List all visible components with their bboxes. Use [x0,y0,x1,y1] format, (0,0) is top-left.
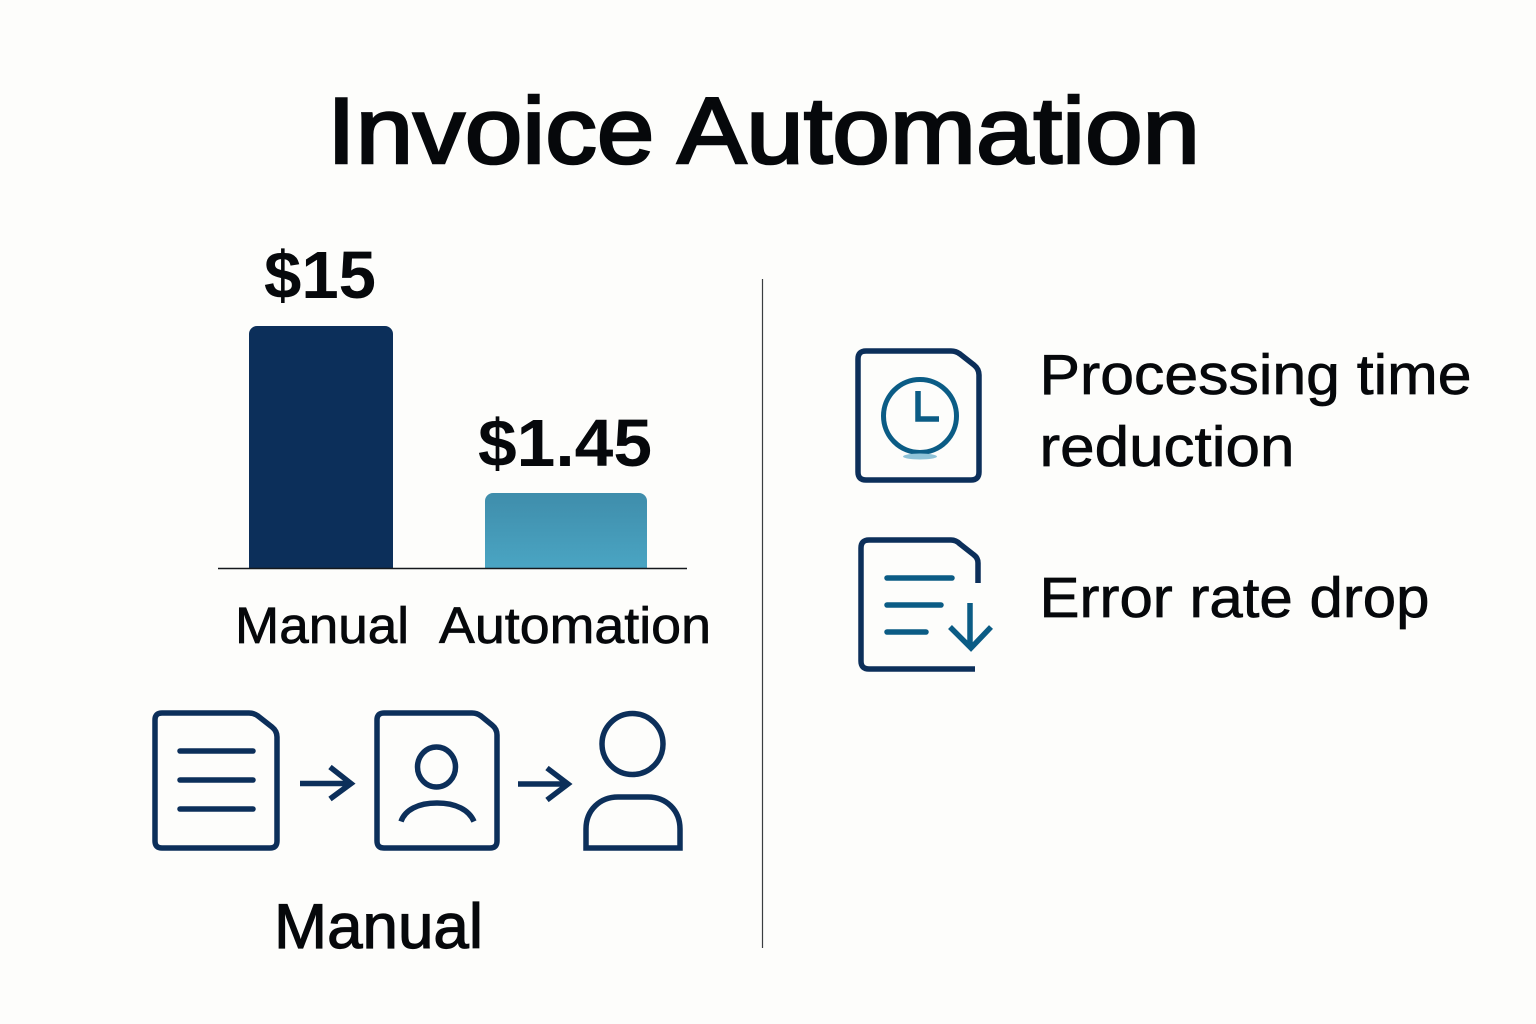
chart baseline [218,568,687,570]
text: Processing time reduction: reduction [1040,415,1294,479]
icon: person [586,714,680,848]
value: $1.45: $1.45 [478,406,652,481]
text: Processing time reduction: Processing time [1040,343,1472,407]
icon: clock document [858,351,979,480]
title: Invoice Automation [327,78,1200,183]
panel: manual workflow [155,713,680,848]
center divider [762,279,764,948]
icon: document with down arrow [861,540,991,669]
bar: manual [249,326,393,568]
arrow: document to profile [300,767,351,799]
value: $15: $15 [264,238,376,313]
axis label: Automation: Automation [439,597,711,654]
axis label: Manual: Manual [235,597,409,654]
bar: automation [485,493,647,568]
label: Manual workflow: Manual [274,892,483,962]
icon: text document [155,713,277,848]
icon: profile document [377,713,497,848]
panel: benefit error rate [861,540,1430,669]
text: Processing time reduction [1040,343,1472,479]
panel: cost bar chart [218,238,711,654]
arrow: profile to person [518,768,568,800]
panel: benefit processing time [858,343,1472,480]
text: Error rate drop: Error rate drop [1040,566,1430,630]
